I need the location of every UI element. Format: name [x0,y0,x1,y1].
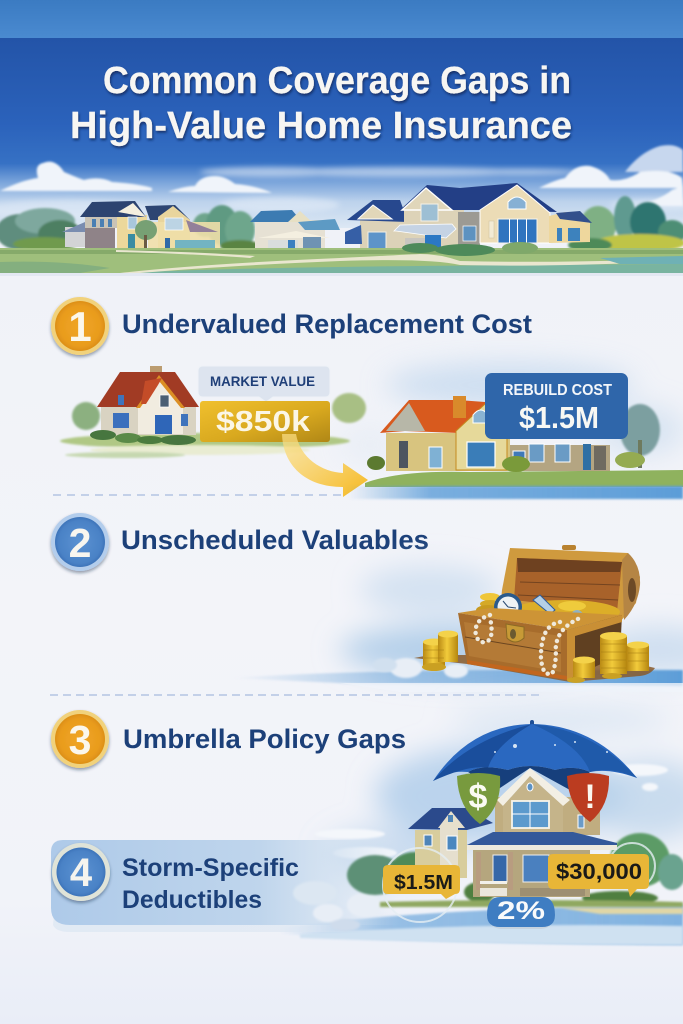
value tag: 1.5M [383,865,460,899]
panel 4 [51,840,400,932]
value tag: 30,000: $30,000 [556,859,642,884]
shield: exclamation: ! [584,778,596,816]
rebuild cost box [485,373,628,439]
section 3: umbrella policy gaps [51,706,683,883]
heading 4: Storm-Specific [122,854,299,882]
illustration: market value house [60,366,366,458]
section 1: undervalued replacement cost [51,297,683,499]
rebuild cost box: $1.5M [519,400,599,435]
trees and shrubs [347,833,683,914]
heading 4 [122,854,299,914]
treasure pile [476,593,620,624]
umbrella [433,720,637,790]
badge 4 [52,843,110,901]
arrow from market value to rebuild cost [282,434,368,497]
heading 4: Deductibles [122,886,262,914]
badge 3: 3 [69,717,91,763]
divider [53,494,345,496]
shield: dollar: $ [469,778,488,816]
section 4: storm-specific deductibles panel [51,840,683,945]
shield: exclamation [567,773,609,822]
page band below header [0,273,683,276]
house group: left [62,201,220,249]
ring decorations [383,843,655,922]
clouds [0,145,683,206]
title [70,60,572,147]
shield: dollar [457,773,500,824]
market value label [198,366,330,402]
title: Common Coverage Gaps in [103,60,571,102]
percent badge: 2% [497,897,545,925]
header banner [0,0,683,273]
badge 3 [51,710,109,768]
house group: middle [250,210,340,249]
lawn and path [0,242,683,273]
market value label: MARKET VALUE [210,373,315,389]
value tag: 1.5M: $1.5M [394,872,453,894]
pearls [476,615,580,674]
cloud wash behind rebuild house [340,363,683,461]
divider [50,694,540,696]
title: High-Value Home Insurance [70,105,572,147]
badge 2: 2 [69,520,91,566]
value tag: 30,000 [548,854,649,897]
coin stacks [422,630,649,683]
heading 2: Unscheduled Valuables [121,525,429,555]
badge 1: 1 [68,303,92,350]
heading 1: Undervalued Replacement Cost [122,309,532,339]
sky wash behind chest [230,566,683,692]
badge 4: 4 [70,851,93,895]
lower sky wash [280,905,683,945]
850k value box: $850k [216,406,311,438]
house group: right large [345,183,592,253]
badge 2 [51,513,109,571]
section 2: unscheduled valuables [50,513,683,695]
heading 3: Umbrella Policy Gaps [123,724,406,754]
treasure chest [414,545,655,683]
sky wash behind house [315,706,683,883]
trees left [0,196,683,252]
percent badge [487,897,555,929]
illustration: rebuild house [347,396,683,499]
850k value box [200,401,330,442]
rocks [293,881,381,931]
badge 1 [51,297,109,355]
house [408,768,617,897]
illustration: home under umbrella [347,720,683,929]
rebuild cost box: REBUILD COST [503,382,612,399]
